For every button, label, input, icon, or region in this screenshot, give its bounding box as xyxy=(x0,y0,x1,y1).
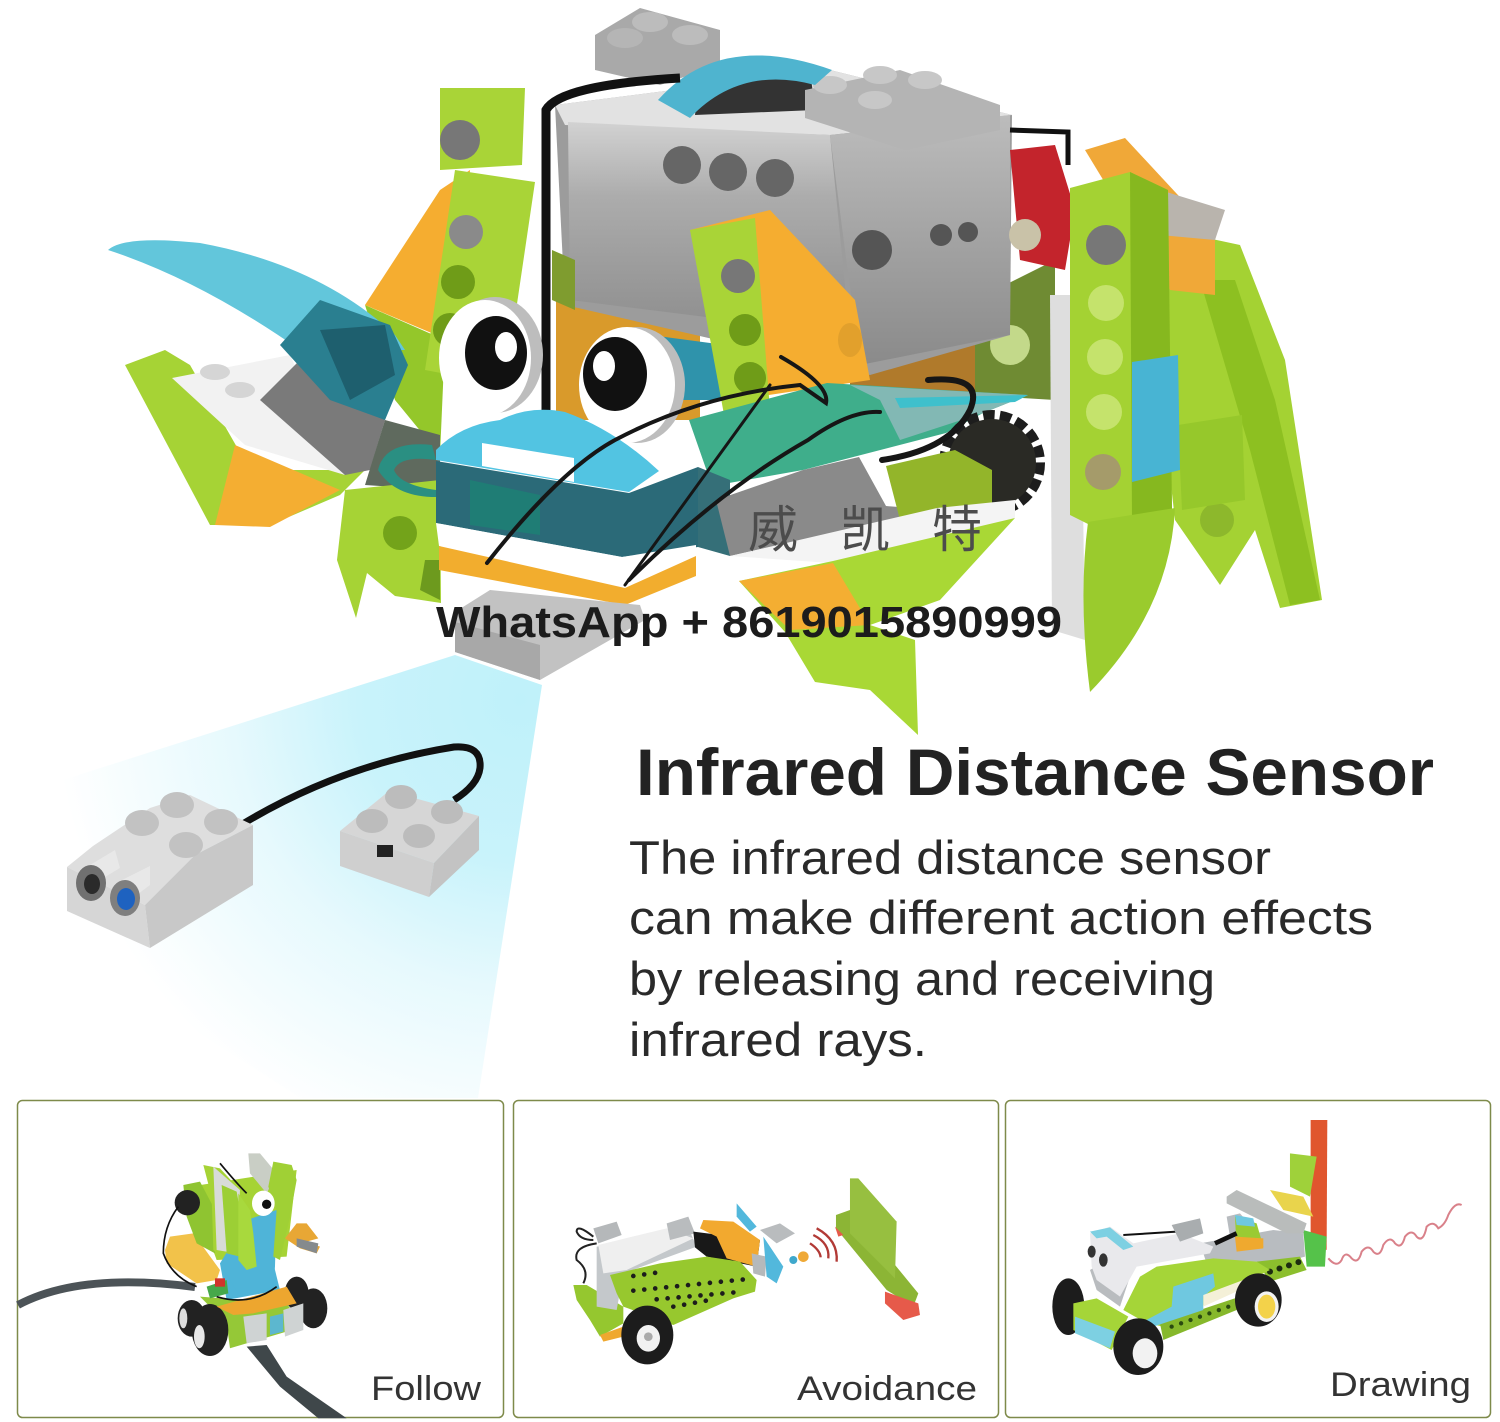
watermark: Chinese characters: 威凯特 xyxy=(748,502,1024,558)
icon: obstacle wall xyxy=(835,1178,920,1320)
robot: eyes xyxy=(439,297,685,443)
sensor modules xyxy=(67,747,480,948)
panel: Avoidance xyxy=(514,1100,998,1418)
robot: mandible lower xyxy=(125,350,385,527)
label: Follow xyxy=(371,1370,481,1408)
robot: infrared sensor under snout xyxy=(455,590,645,680)
icon: avoidance car xyxy=(573,1203,809,1364)
description text xyxy=(629,831,1373,1066)
light beam xyxy=(0,655,542,1098)
icon: signal arcs xyxy=(810,1228,837,1262)
robot: blue arch xyxy=(658,55,832,118)
icon: drawing car xyxy=(1052,1120,1327,1375)
robot: transparent green arm xyxy=(689,383,1028,486)
cable xyxy=(241,747,480,825)
robot: green strip beside cable xyxy=(552,250,575,310)
robot: grey hub body xyxy=(555,70,1012,375)
description text: The infrared distance sensor xyxy=(629,831,1271,884)
robot: back leg right xyxy=(1150,230,1322,608)
robot: lower centre leg xyxy=(739,518,1015,735)
robot: top studs xyxy=(595,8,720,85)
robot: white panel xyxy=(1050,295,1085,640)
robot: red connector xyxy=(1009,145,1225,270)
description text: can make different action effects xyxy=(629,891,1373,944)
label: Drawing xyxy=(1330,1366,1471,1404)
robot: centre wing xyxy=(690,210,870,420)
robot: black gear xyxy=(946,417,1038,509)
robot: grey mid body xyxy=(698,450,1015,563)
robot: dark slot under arch xyxy=(695,70,815,115)
black line track xyxy=(18,1282,195,1305)
icon: infrared sensor block xyxy=(67,792,253,948)
drawn red squiggle xyxy=(1328,1204,1462,1264)
watermark: hand-drawn logo xyxy=(487,357,973,585)
robot: lower left leg xyxy=(337,480,441,618)
robot: mandible upper xyxy=(108,240,408,420)
robot: joint behind snout xyxy=(365,420,440,490)
icon: receiver block xyxy=(340,785,479,897)
robot: black cables xyxy=(546,78,1068,410)
panel: Follow xyxy=(18,1100,504,1418)
panel: Drawing xyxy=(1006,1100,1490,1418)
robot: parts under the hub xyxy=(556,260,1055,420)
robot: hub studs xyxy=(805,66,1000,150)
main robot illustration xyxy=(108,8,1322,735)
description text: infrared rays. xyxy=(629,1013,927,1066)
robot: left green beam and orange wing xyxy=(365,88,535,455)
robot: right orange wing xyxy=(1085,138,1215,295)
label: Avoidance xyxy=(797,1370,977,1408)
icon: follow robot xyxy=(163,1153,347,1418)
heading: Infrared Distance Sensor xyxy=(636,735,1434,809)
robot: front right tall beam xyxy=(1070,172,1180,692)
robot: snout xyxy=(378,410,698,605)
watermark: WhatsApp number: WhatsApp + 8619015890999 xyxy=(436,598,1062,647)
description text: by releasing and receiving xyxy=(629,952,1215,1005)
